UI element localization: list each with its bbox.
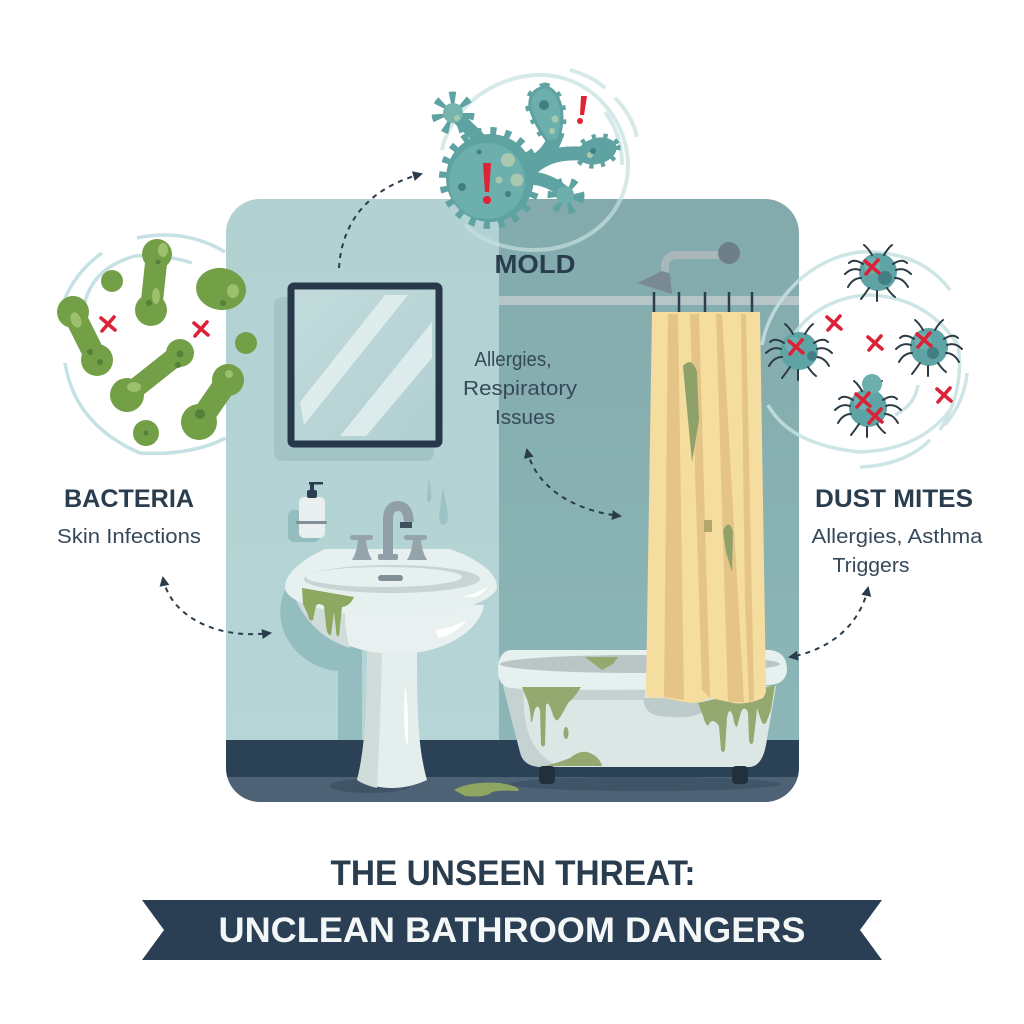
mold description <box>463 349 577 429</box>
warning marks <box>483 96 587 204</box>
shower head <box>637 242 740 294</box>
soap dispenser <box>288 482 327 542</box>
bacteria cells <box>57 239 257 446</box>
mite swirl rings <box>762 252 967 467</box>
bathtub <box>498 650 787 784</box>
title: THE UNSEEN THREAT: <box>330 854 696 893</box>
banner <box>142 900 882 960</box>
sink mold <box>302 588 354 636</box>
floor <box>227 777 798 802</box>
right lobe <box>574 133 620 169</box>
dust mites description: Triggers <box>832 555 910 577</box>
arrow: bacteria to sink <box>163 578 270 634</box>
arrow: room to mold <box>339 174 421 268</box>
pedestal floor shadow <box>330 779 410 793</box>
floor puddle <box>454 783 519 796</box>
panel: mold <box>439 70 637 429</box>
dust mites description <box>812 526 983 577</box>
finger lobes <box>439 99 467 127</box>
banner text: UNCLEAN BATHROOM DANGERS <box>218 911 806 950</box>
pedestal <box>357 650 427 788</box>
spiked body <box>444 132 536 224</box>
dust mites description: Allergies, Asthma <box>812 526 983 548</box>
mold swirl rings <box>442 70 637 250</box>
water drips <box>427 478 448 525</box>
panel: dust mites <box>762 245 983 577</box>
mold organism <box>439 87 620 224</box>
baseboard <box>226 740 799 778</box>
tub floor shadow <box>510 777 780 791</box>
marker x <box>101 317 115 331</box>
top-right lobe <box>530 87 562 142</box>
left wall <box>226 199 500 744</box>
mold description: Respiratory <box>463 378 577 400</box>
bacteria description: Skin Infections <box>57 526 201 548</box>
arrows <box>163 174 868 657</box>
marker x <box>194 322 208 336</box>
bacteria swirl rings <box>63 235 226 453</box>
faucet <box>350 506 427 560</box>
arrow: mold to curtain <box>527 450 620 516</box>
mirror <box>274 286 439 461</box>
panel: bathroom scene <box>226 199 799 807</box>
rim <box>285 549 497 617</box>
mites <box>766 245 962 437</box>
shower rail <box>499 296 799 305</box>
mold heading: MOLD <box>494 249 576 279</box>
mold description: Issues <box>495 407 555 429</box>
cell spots <box>454 115 593 186</box>
dust mites heading: DUST MITES <box>815 485 973 513</box>
mold description: Allergies, <box>474 349 552 371</box>
arrow: mites to tub <box>790 588 868 657</box>
marker x <box>789 260 951 423</box>
pedestal sink <box>285 506 497 788</box>
panel: bacteria <box>57 235 257 548</box>
bacteria heading: BACTERIA <box>64 485 194 513</box>
sink shadow <box>280 590 362 740</box>
right wall <box>499 199 799 744</box>
shower curtain <box>646 292 766 703</box>
tub mold patches <box>522 657 775 766</box>
tub rim <box>498 650 787 689</box>
bowl <box>296 600 484 654</box>
